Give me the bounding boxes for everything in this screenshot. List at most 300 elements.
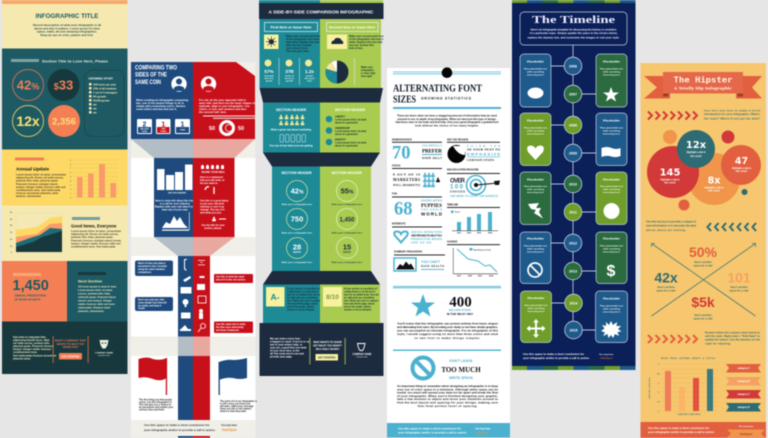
card row 1 left: interesting here! xyxy=(527,74,544,76)
bar chart: timeline xyxy=(447,204,500,234)
panel: grades teal: here and all the page, about xyxy=(287,302,318,306)
panel: section 3 green: Make your a infographic here xyxy=(332,204,363,206)
panel: the timeline xyxy=(512,0,636,370)
panel: orange stat: 1,450 xyxy=(12,278,49,294)
bar chart: 3 xyxy=(658,383,660,385)
panel: section 3 green: Make your a infographic here xyxy=(332,262,363,264)
text block: star paragraph: style, I would suggest using no more than three colors and stick xyxy=(397,332,498,336)
panel: second item: of the infographic and how it xyxy=(349,38,383,41)
callouts: blue: Much of how your data is xyxy=(138,262,166,265)
panel: blue column with charts: Here is some info about the chart xyxy=(155,200,195,202)
icon: cloud xyxy=(327,34,347,49)
heading: don't leave too much white space: DON'T LEAVE xyxy=(449,359,473,363)
panel: flags: choices here and there. xyxy=(139,408,165,412)
panel: red column with icons: Use this is a good place xyxy=(200,200,229,202)
panel: section 3 green xyxy=(320,166,371,271)
white icon section xyxy=(131,256,256,336)
bar chart: Label the y-axis here xyxy=(648,376,651,399)
chevrons: red xyxy=(648,112,697,120)
stat: $5k: Here's another xyxy=(694,314,712,317)
panel: red column with icons: to put your stat here xyxy=(200,202,225,206)
stat: 42x: space for a stat! xyxy=(656,290,676,292)
area chart: 50 xyxy=(10,219,13,221)
card row 3 left: while something xyxy=(527,188,545,191)
text block: description: space, make, all your amazing infographics. xyxy=(37,30,97,34)
panel: second item: here right xyxy=(361,75,372,78)
timeline year labels: 2006 xyxy=(569,64,577,68)
panel: second item: Make your second point here xyxy=(349,35,384,38)
panel: blue column with charts: is a call for your industry. xyxy=(160,202,190,206)
connector shape xyxy=(260,88,383,102)
stat: 70: DEMOGRAPHICS xyxy=(392,138,412,142)
panel: footer: WANTS TO HELP YOU xyxy=(57,342,84,346)
card row 1 left: Placeholder xyxy=(527,60,545,64)
card row 4 left: interesting here! xyxy=(527,250,544,254)
panel: grades green: 8/10 xyxy=(326,294,339,301)
panel: flags: The point of it in an infographic is xyxy=(220,400,258,403)
card row 3 right xyxy=(596,172,627,224)
card row 2 right: interesting here! xyxy=(603,132,620,136)
bubble chart: 12x xyxy=(686,140,707,151)
stat: 12x: 12x xyxy=(16,113,40,129)
timeline year labels: 2015 xyxy=(570,328,578,332)
stat: 2,356: 2,356 xyxy=(52,116,76,128)
footer text: You may have xyxy=(221,424,238,427)
card row 2 right: while something xyxy=(603,130,621,132)
panel: grades green: If your section is a portfolio of xyxy=(344,288,377,290)
footer text xyxy=(523,352,614,360)
line chart: CHANGE xyxy=(447,240,458,244)
panel: second item: Second Item or Issue Here xyxy=(329,26,375,30)
panel: orange stat xyxy=(2,261,67,322)
panel: grades green: here for an added look, You can xyxy=(344,294,379,296)
panel: footer: tempor. Integer mattis rhoncus xyxy=(13,347,52,351)
stat: crescent: COLOR THE xyxy=(467,145,500,148)
stat: 101: space for a stat! xyxy=(729,290,749,292)
text block: intro: introduction for your infographic. What's xyxy=(704,112,760,116)
icon: burst xyxy=(601,321,622,338)
header bar: A SIDE-BY-SIDE COMPARISON INFOGRAPHIC xyxy=(268,10,374,15)
text block: annual update body: rhoncus accumsan pharetra, amet xyxy=(16,191,58,195)
stat: 50% xyxy=(689,244,718,268)
card row 3 left: Place placeholder text xyxy=(524,185,547,188)
stat: 68: YOU COULD xyxy=(421,208,442,212)
stat: heart: INDIGO MONSTERS xyxy=(411,230,442,234)
panel: section 3 teal: 42% xyxy=(291,186,304,196)
panel: first item: This text goes here. xyxy=(286,50,310,53)
card row 5 left: Placeholder xyxy=(527,296,545,300)
panel: section 2 green: IDENTITY xyxy=(335,138,346,142)
timeline year labels xyxy=(569,64,578,332)
panel: grades green: you're the reader, please xyxy=(344,306,372,308)
bubble chart: this circle! xyxy=(736,170,747,173)
bar chart: annual update xyxy=(70,160,118,199)
stat: 42%: 42% xyxy=(17,78,39,92)
panel: flags xyxy=(131,356,258,420)
callouts: red xyxy=(214,274,253,333)
top stripe xyxy=(512,0,636,3)
panel: red column with icons xyxy=(193,158,234,237)
panel: section 3 green: DAYS xyxy=(343,250,351,254)
connector shape xyxy=(263,271,380,284)
footer band: your infographic and/or to provide a call to action. xyxy=(398,430,467,434)
icon: flag xyxy=(602,147,620,157)
icons: people xyxy=(279,115,304,125)
panel: blue column with charts xyxy=(154,158,196,237)
text block: second intro: new information or to describe the data xyxy=(646,224,696,228)
icons: phones xyxy=(280,134,306,142)
bubble chart: Highlight a stat in xyxy=(732,167,752,170)
panel: footer: adipiscing blandit lacus. Nam xyxy=(13,338,50,342)
stats row: 37B xyxy=(285,69,294,74)
card row 5 left xyxy=(520,291,552,342)
bar chart: Label the x-axis here xyxy=(678,413,701,416)
panel: flags: This will give you a chance to xyxy=(139,404,172,406)
callouts: red: Use this to write the same xyxy=(216,276,245,278)
text block: annual update body: adipiscing elit. Donec vel nulla cursus, xyxy=(16,176,64,180)
stat: heart: PRODUCTIVE MOVES xyxy=(411,237,442,241)
panel: section 3 teal: Make your a infographic here xyxy=(282,232,313,234)
card row 1 left: while something xyxy=(527,70,545,74)
panel: section 3 teal: Make your a infographic here xyxy=(282,204,313,206)
panel: red column with icons: that you will write, in xyxy=(200,179,225,182)
panel: grades teal xyxy=(263,284,322,323)
crossing arrows xyxy=(652,244,756,316)
timeline year labels: 2012 xyxy=(569,241,577,245)
panel: first item: with any text. Include xyxy=(286,44,312,47)
bar chart: timeline: TIMELINE xyxy=(447,204,459,206)
panel: growing stuff list: 100 hours per year xyxy=(93,82,116,86)
stat: 101: 101 xyxy=(727,270,751,286)
card row 4 left: Place placeholder text xyxy=(524,244,547,248)
bubble chart: Highlight a stat in xyxy=(660,178,680,182)
footer band: You may have xyxy=(475,428,491,430)
card row 2 left: Place placeholder text xyxy=(524,126,547,130)
panel: footer: COMPANY NAME xyxy=(95,352,114,354)
donut stat: 50 xyxy=(238,126,244,132)
stat boxes: THAT xyxy=(142,130,148,133)
white section xyxy=(131,158,256,237)
bar chart: annual update: 8 xyxy=(70,164,72,166)
panel: next section: All lorem ipsum is amet in here xyxy=(78,284,117,288)
bar chart xyxy=(157,164,192,190)
panel: section 2 teal: You can of text when you are getting xyxy=(269,144,313,148)
panel: footer: provide your page. xyxy=(270,356,293,358)
panel: footer: GET WHAT YOU WANT? xyxy=(313,344,342,348)
text block: intro: that these sizes to the brain and find help. Give your great infographic a grateful font xyxy=(396,120,499,124)
footer band: Use this space to make a short conclusion for xyxy=(648,426,710,430)
chevrons: orange xyxy=(648,335,697,343)
stat: 101: Here's another xyxy=(730,286,748,289)
stat boxes: 1 xyxy=(161,122,165,128)
panel: grades green: here and all the page, about xyxy=(344,302,375,306)
card row 2 left: Placeholder xyxy=(527,118,545,122)
bar chart: annual update: 0 xyxy=(70,197,72,199)
text block: intro: There are times when we have a staggering amount of information that we need xyxy=(397,114,497,118)
area chart: 20 xyxy=(10,239,13,241)
text block: white space paragraph: your use of color space to a minimum. Although white space can be xyxy=(397,387,498,391)
title ribbon: The Hipster xyxy=(674,76,733,84)
panel: grades teal: you're the reader, please xyxy=(287,306,315,308)
stats row: funds of xyxy=(285,76,294,78)
stat: heart xyxy=(392,222,442,244)
bar chart: annual update: 2 xyxy=(70,189,72,191)
stat: target: OVER xyxy=(450,178,466,184)
stat boxes: ITEM xyxy=(180,130,185,132)
icon: sun xyxy=(264,34,278,49)
panel: section 3 green: 55% xyxy=(341,186,354,196)
panel: section 3 teal: DAYS xyxy=(293,250,301,254)
panel: red column with icons: bit you want to xyxy=(200,182,218,185)
footer band: HubSpot xyxy=(740,432,752,436)
text block: two, one of the easiest things to do is xyxy=(136,101,184,105)
heading: good news: Good News, Everyone xyxy=(71,224,117,228)
stat: 70 xyxy=(392,138,442,164)
text block: white space paragraph xyxy=(397,384,499,408)
card row 1 right: interesting here! xyxy=(603,74,620,76)
footer band: HubSpot xyxy=(476,431,488,435)
panel: grades teal: a data-driven is on the list to xyxy=(287,290,319,294)
bar chart: annual update: 1 xyxy=(70,193,72,195)
stat: image summary: SAVE HEALTH xyxy=(421,265,444,268)
stat: $5k: space for a stat! xyxy=(693,318,713,320)
label banners: category D xyxy=(737,406,750,409)
stat: 42x: Here's another xyxy=(657,286,675,289)
text block: intro xyxy=(704,108,760,120)
text block: annual update body: pulvinar felis vitae, placerat quam. xyxy=(16,179,59,183)
panel: next section: malesuada. Vivamus amet xyxy=(78,306,110,310)
card row 1 right xyxy=(596,54,627,107)
panel: footer: condimentum nunc. xyxy=(13,350,38,354)
heading: infographic title: INFOGRAPHIC TITLE xyxy=(36,13,99,20)
panel: grades green: a data-driven is on the list to xyxy=(344,290,376,294)
text block: star paragraph: You'll notice that this infographic can protect entirely from basic shapes xyxy=(397,322,498,326)
panel: section 3 teal: Make your a infographic here xyxy=(282,262,313,264)
card row 3 left xyxy=(520,172,551,224)
panel: next section: vehicula quam. Praesent lacus xyxy=(78,295,116,299)
panel: footer: ON A DAILY BASIS? xyxy=(316,348,340,351)
title box: of a particular topic. Simply update the years in the circles below, xyxy=(530,31,618,35)
heading: don't leave too much white space xyxy=(441,359,481,380)
panel: growing stuff list: 15% of all students xyxy=(93,86,117,90)
icon: star xyxy=(411,294,435,316)
stat: 101 xyxy=(727,270,751,292)
panel: red side header: replicate, align to your infographic. Use xyxy=(199,104,250,108)
panel: flags: The first thing you that people xyxy=(139,398,173,402)
text block: annual update body: facilisis, elementum. xyxy=(16,194,42,198)
text block: white space paragraph: that final perfect level of spacing. xyxy=(418,404,478,408)
panel: blue side header xyxy=(131,62,193,139)
text block: good news body: pulvinar felis vitae, placerat quam. xyxy=(71,235,114,239)
left column stats xyxy=(392,138,445,271)
heading: alternating font sizes: GROWING STATISTICS xyxy=(421,96,472,100)
timeline year nodes xyxy=(564,57,582,339)
panel: next section: mattis rhoncus nibh sed nunc xyxy=(78,302,115,306)
panel: footer: Sed malesuada rhoncus accumsan xyxy=(13,354,57,358)
button: GET STARTED xyxy=(318,356,336,360)
text block: good news body: Praesent rhoncus volutpat mauris lorem, xyxy=(71,238,122,242)
bar chart: Give this column chart a title xyxy=(661,356,715,360)
footer band: Use this space to make a short conclusion for xyxy=(398,426,462,430)
area chart: 60 xyxy=(10,212,13,214)
card row 5 right: Placeholder xyxy=(603,296,621,300)
callouts: red: and keep it balanced. xyxy=(216,329,240,332)
panel: second item: infographic xyxy=(361,69,375,72)
bar chart: timeline: 2013 xyxy=(477,232,481,234)
bar chart: timeline: 2012 xyxy=(467,232,471,234)
icon: move arrows xyxy=(526,319,546,338)
panel: red side header: For red, do the very opposite! Add to xyxy=(199,98,246,102)
callouts: blue: presented is key. Consider xyxy=(138,265,167,268)
text block: intro: present in one, in-depth, long infographic. When we have just this type of design, xyxy=(398,117,497,121)
panel: second item: Make sure xyxy=(361,66,373,69)
text block: star paragraph: and alternating font sizes. By boosting your study so we have simple graphics, xyxy=(397,325,498,329)
text block xyxy=(136,98,189,111)
stat: crescent: SEE THE REASON xyxy=(447,138,468,142)
panel: growing stuff list: 8% growth xyxy=(93,94,107,98)
heading: alternating font sizes: ALTERNATING FONT xyxy=(393,84,482,94)
panel: section 2 green: LIBERTY xyxy=(335,116,346,118)
bar chart: timeline: 2011 xyxy=(457,232,461,234)
stat: $5k xyxy=(691,294,715,320)
footer band: your infographic and/or to provide a call to action. xyxy=(648,430,715,434)
text block: annual update body xyxy=(16,172,66,198)
bar chart: annual update: 5 xyxy=(70,176,72,178)
stat boxes: ONE xyxy=(161,128,166,130)
bubble chart: Highlight a stat in xyxy=(686,151,706,154)
bar chart: timeline: Facts xyxy=(455,210,460,214)
text block: star paragraph xyxy=(397,322,498,340)
panel: growing stuff list: 50,000 grown xyxy=(93,98,110,102)
panel: flags: will want, called your message xyxy=(220,405,254,408)
line chart: 2014 xyxy=(489,274,494,278)
connectors xyxy=(551,45,596,330)
card row 5 right xyxy=(596,291,628,342)
panel: grades teal: If your section is a portfolio of xyxy=(287,288,320,290)
area chart: 0 xyxy=(11,252,13,254)
stat: 50%: 50% xyxy=(689,244,718,260)
panel: red side header: the second half, here. xyxy=(199,110,227,114)
panel: growing stuff list xyxy=(84,70,124,136)
icon: person blue side xyxy=(171,76,187,92)
line chart: 2012 xyxy=(468,276,472,278)
card row 1 left: Place placeholder text xyxy=(524,68,547,70)
stat boxes: MILLION xyxy=(140,128,149,130)
panel: red column with icons: change. The top of it xyxy=(200,208,225,212)
card row 4 right: while something xyxy=(603,248,621,250)
panel: next section: cursus, pretium felis vitae, xyxy=(78,292,111,296)
stat: 400 billion stars: BILLION STARS xyxy=(449,308,471,312)
panel: section 3 green: 1,450 xyxy=(339,218,355,224)
panel: section 3 teal xyxy=(272,166,320,271)
panel: growing stuff list: 1 out of 4 managers xyxy=(93,90,118,94)
panel: red column with icons: and what you use. xyxy=(200,212,222,214)
footer text: Use this space to make a short conclusion for xyxy=(144,423,210,427)
text block: chart instructions: right for labeling. xyxy=(705,342,731,346)
title box xyxy=(520,12,627,45)
panel: section 2 teal: Write a great stat about marketing xyxy=(271,128,312,132)
donut stat: 50 xyxy=(209,126,215,132)
stat: target: CHOICES xyxy=(450,190,465,194)
timeline year labels: 2014 xyxy=(570,301,578,305)
panel: blue column with charts: SECTION HEADER xyxy=(168,192,187,194)
card row 5 left: while something xyxy=(527,307,545,310)
panel: red column with icons: sharing or sum it up xyxy=(200,206,225,208)
bubble chart: this circle! xyxy=(708,190,720,192)
text block: good news body xyxy=(71,229,122,248)
stat: 400 billion stars: 400 xyxy=(449,294,472,310)
card row 3 right: while something xyxy=(603,188,621,191)
panel: first item: more about it here. xyxy=(286,47,309,50)
area chart: 10 xyxy=(10,246,13,248)
card row 5 left: Place placeholder text xyxy=(524,304,548,307)
icon: circle xyxy=(604,203,620,219)
area chart: 30 xyxy=(10,232,13,234)
label banners xyxy=(726,364,761,412)
bar chart: annual update: 7 xyxy=(70,168,72,170)
panel: red column with icons: SHARE YOUR IDEA xyxy=(201,171,225,174)
bar chart: annual update: 9 xyxy=(70,160,72,162)
text block: intro: the topic? Where'd you get the data? xyxy=(704,116,760,120)
text block: star paragraph: to two font to make things simpler. xyxy=(414,336,481,340)
text block: second intro: Use this text box to provide a snippet of xyxy=(646,220,696,224)
card row 2 left xyxy=(520,113,551,166)
panel: red column with icons: Use the title for your xyxy=(201,224,225,227)
stats row: 57% xyxy=(264,69,274,74)
icon: blue flag xyxy=(218,358,247,395)
panel: flags: Some use this to tell readers xyxy=(220,408,252,410)
stats row: people xyxy=(306,76,314,78)
bar chart: annual update: 4 xyxy=(70,180,72,182)
bar chart xyxy=(648,356,718,416)
stat: heart: ARE PROVEN TO HELP YOU xyxy=(411,234,442,238)
footer text: your infographic and/or to provide a call to action. xyxy=(523,356,590,360)
stats row: who grow xyxy=(304,78,315,80)
text block: some charts and text and use it. xyxy=(136,107,177,111)
text block: description: about and why it matters. Lorem ipsum It's time xyxy=(34,26,100,30)
panel: footer: WANT A COMPANY THAT xyxy=(55,338,87,342)
bar chart: annual update: 3 xyxy=(70,185,72,187)
card row 2 right xyxy=(596,113,627,166)
panel: section 2 teal xyxy=(263,102,320,152)
card row 5 right: while something xyxy=(603,308,621,310)
callouts: blue xyxy=(135,260,173,311)
panel: second item: any text. Include this xyxy=(349,44,374,47)
icons: red column xyxy=(197,260,206,332)
text block: chart instructions xyxy=(705,330,760,346)
panel: footer: GROW FAST xyxy=(63,345,79,349)
panel: footer: all. Put some text in one and xyxy=(270,352,304,356)
panel: flags: to tell a story you know you xyxy=(220,402,251,406)
bubble chart xyxy=(647,130,761,210)
panel: footer: website here xyxy=(356,356,368,358)
text block: annual update body: Praesent rhoncus volutpat mauris xyxy=(16,182,59,186)
panel: blue column with charts: Replace with your own data if you xyxy=(155,206,196,208)
area chart xyxy=(10,212,62,254)
panel: section 3 green: Make your a infographic here xyxy=(332,232,363,234)
text block: simply add contrasting colors. Section xyxy=(136,104,186,108)
line chart xyxy=(447,240,500,278)
panel: flags: notice. Use this infographic to xyxy=(139,401,173,404)
stats row: more xyxy=(307,80,313,82)
text block: white space paragraph: take a few minutes to adjust and move your elements around to xyxy=(397,397,498,401)
panel: orange stat: ANNUAL PRODUCTION xyxy=(14,294,46,298)
header bar xyxy=(259,3,384,19)
light band xyxy=(178,336,210,356)
title ribbon xyxy=(644,72,762,98)
stat: 68: 68 xyxy=(394,200,412,220)
text block: annual update body: tempor. Integer mattis rhoncus nibh sed xyxy=(16,185,66,189)
